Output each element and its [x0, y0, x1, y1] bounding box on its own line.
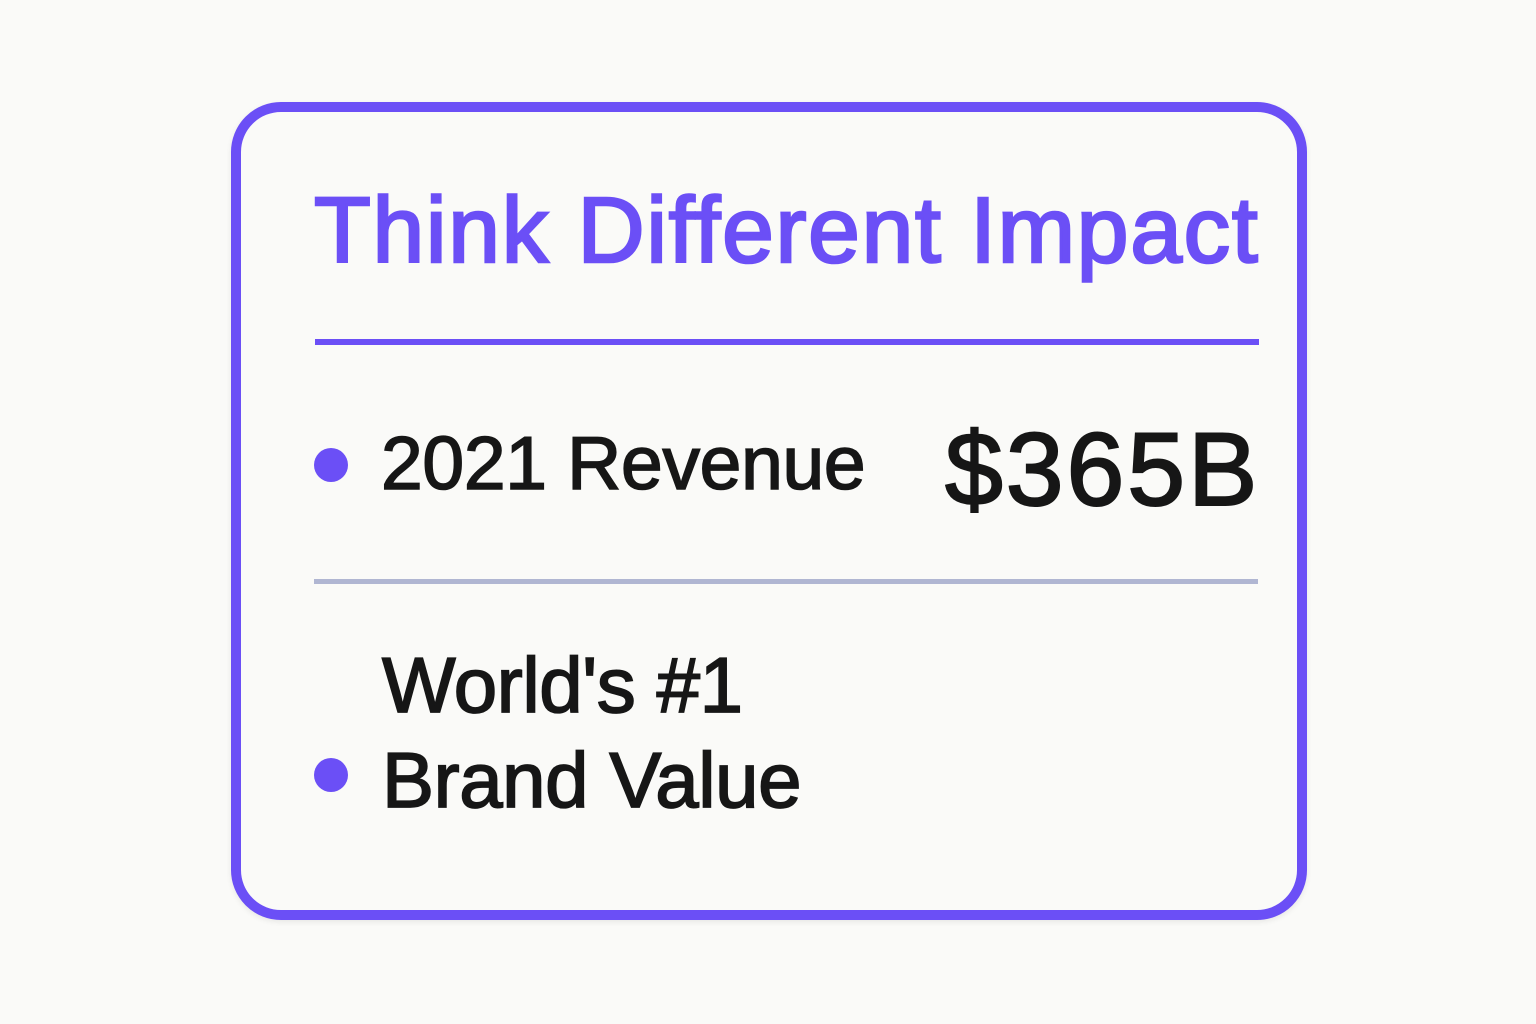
bullet: brand value — [314, 758, 348, 792]
label: World's #1 Brand Value — [381, 641, 801, 824]
bullet: revenue — [314, 448, 348, 482]
panel: Think Different Impact card — [231, 102, 1307, 920]
row divider — [314, 579, 1258, 584]
label: 2021 Revenue: 2021 Revenue — [381, 421, 865, 505]
label: World's #1 Brand Value: World's #1 — [382, 641, 743, 729]
value: $365B: $365B — [945, 412, 1260, 528]
title: Think Different Impact — [314, 178, 1259, 282]
label: World's #1 Brand Value: Brand Value — [382, 736, 801, 824]
title divider — [315, 339, 1259, 345]
